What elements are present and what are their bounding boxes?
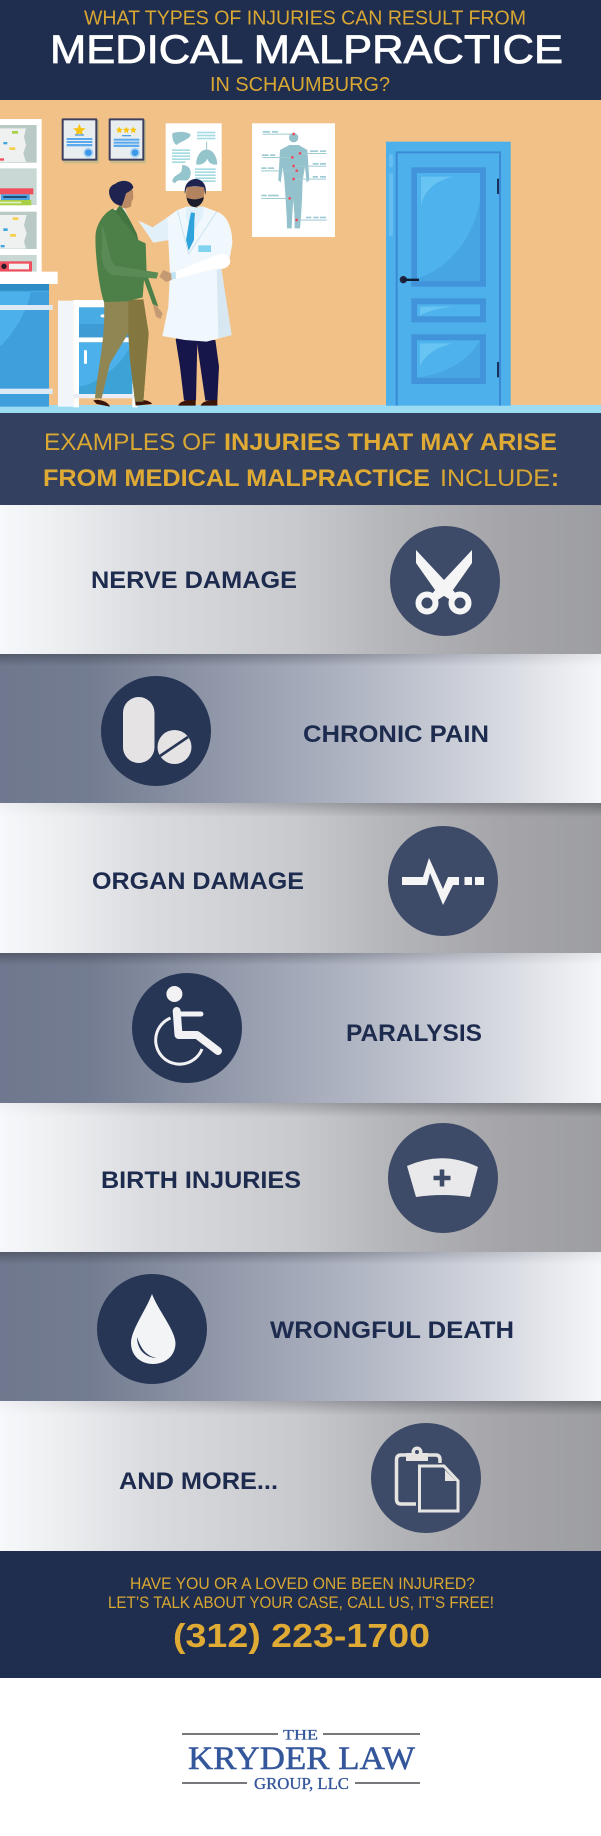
icon: heartbeat <box>388 826 498 936</box>
panel: chronic pain <box>0 654 601 803</box>
icon: scissors <box>390 526 500 636</box>
heading line one <box>44 429 557 456</box>
panel: examples heading <box>0 413 601 505</box>
panel: organ damage <box>0 803 601 953</box>
label: AND MORE... <box>119 1468 278 1495</box>
heading line one: INJURIES THAT MAY ARISE <box>224 429 557 456</box>
floor <box>0 405 601 413</box>
question text: HAVE YOU OR A LOVED ONE BEEN INJURED? <box>130 1575 475 1593</box>
icon: clipboard <box>371 1423 481 1533</box>
heading line: in schaumburg: IN SCHAUMBURG? <box>210 74 390 96</box>
label: ORGAN DAMAGE <box>92 868 304 895</box>
panel: header <box>0 0 601 100</box>
logo: THE <box>283 1728 318 1744</box>
icon: drop <box>97 1274 207 1384</box>
heading line two: FROM MEDICAL MALPRACTICE <box>43 465 430 492</box>
label: WRONGFUL DEATH <box>270 1317 514 1344</box>
label: CHRONIC PAIN <box>303 721 489 748</box>
panel: nerve damage <box>0 505 601 654</box>
patient <box>93 181 163 407</box>
panel: paralysis <box>0 953 601 1103</box>
panel: call to action <box>0 1551 601 1678</box>
label: PARALYSIS <box>346 1020 482 1047</box>
heading line one: EXAMPLES OF <box>44 429 216 456</box>
icon: pills <box>101 676 211 786</box>
logo: KRYDER LAW <box>188 1741 416 1777</box>
heading line two: : <box>551 465 559 492</box>
shelves and cabinets <box>0 119 138 407</box>
title: MEDICAL MALPRACTICE <box>50 28 563 72</box>
organ poster <box>166 123 222 191</box>
label: BIRTH INJURIES <box>101 1167 301 1194</box>
invitation text: LET’S TALK ABOUT YOUR CASE, CALL US, IT’S FREE! <box>108 1594 494 1612</box>
wall certificates <box>62 118 146 163</box>
icon: wheelchair <box>132 973 242 1083</box>
logo <box>182 1728 420 1793</box>
phone number: (312) 223-1700 <box>173 1617 430 1654</box>
logo: GROUP, LLC <box>254 1774 349 1793</box>
heading line: what types of injuries: WHAT TYPES OF INJURIES CAN RESULT FROM <box>84 8 526 30</box>
icon: nurse cap <box>388 1123 498 1233</box>
heading line two: INCLUDE <box>440 465 550 492</box>
body chart poster <box>252 123 335 237</box>
label: NERVE DAMAGE <box>91 567 297 594</box>
panel: wrongful death <box>0 1252 601 1401</box>
doctor <box>138 179 232 406</box>
panel: clinic illustration <box>0 100 601 413</box>
panel: birth injuries <box>0 1103 601 1252</box>
door <box>386 142 511 406</box>
panel: and more <box>0 1401 601 1551</box>
